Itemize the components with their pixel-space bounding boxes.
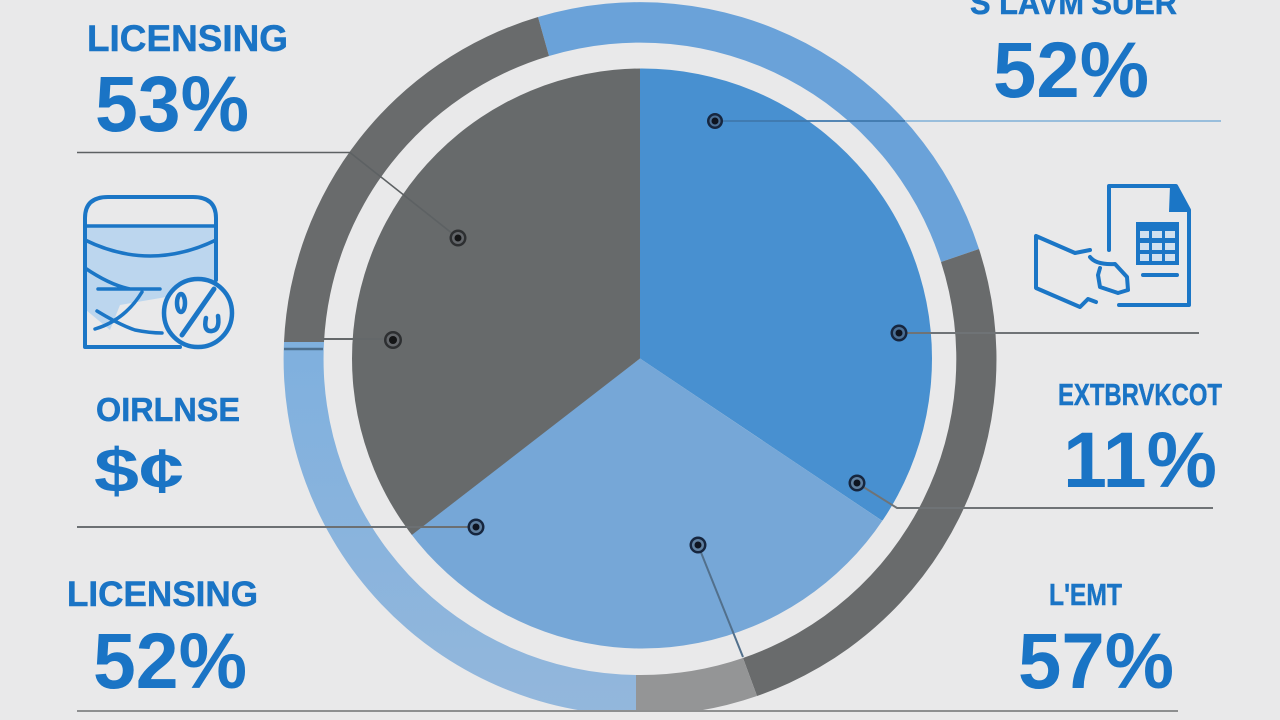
marker 3 [384,331,402,349]
stat: licensing 53% [87,18,288,148]
leader: licensing 53% [77,152,458,238]
marker 1 [707,113,723,129]
icon: database with percent badge [85,197,232,347]
pie slice: grey [352,68,640,535]
icon outer frame [85,197,216,347]
label: EXTBRVKCOT [1058,377,1222,412]
pie chart [352,68,932,648]
ring segment: lower-left blue [284,342,636,716]
pie slice: blue [640,68,932,521]
icon curves [85,240,216,333]
marker 5 [848,474,866,492]
icon: document with table and hand [1036,186,1190,307]
label: LICENSING [87,18,288,59]
leader: bottom [698,545,743,657]
value: $¢ [94,437,184,506]
table caption line [1143,273,1177,277]
leader lines [77,121,1221,711]
baseline rule [77,710,1178,712]
leader: right middle [899,332,1199,334]
label: L'EMT [1049,577,1122,612]
ring segment: right grey [743,249,996,696]
hand [1036,236,1128,307]
outer ring [284,2,996,716]
value: 57% [1018,616,1174,705]
stat: right 11% [1058,377,1222,504]
stat: top right 52% [970,0,1177,114]
stat: bottom right 57% [1018,577,1174,705]
document outline [1109,186,1189,305]
value: 52% [993,25,1149,114]
value: 53% [95,59,249,148]
label: LICENSING [67,575,258,614]
value: 52% [93,616,247,705]
leader: top right over pie [715,120,905,122]
ring band shadow [284,348,323,350]
ring segment: bottom light grey [636,658,757,716]
stat: licensing 52% [67,575,258,705]
document corner fold [1169,186,1190,212]
icon panel fill [86,226,215,330]
table [1136,222,1179,265]
marker 4 [890,324,908,342]
stat: left middle currency [94,391,240,506]
marker dots [384,113,908,554]
pie slice: light blue [410,358,882,648]
value: 11% [1063,415,1217,504]
leader: lower left [77,526,476,528]
icon shelf line [85,224,216,228]
ring segment: upper-left grey [284,17,549,342]
leader: extbrvkcot [857,483,1213,508]
ring segment: top blue [538,2,979,262]
icon percent badge [164,279,232,347]
leader: left middle [323,338,393,340]
marker 6 [468,518,484,536]
marker 2 [450,230,466,246]
marker 7 [690,536,706,554]
leader: top right [715,120,1221,122]
label: OIRLNSE [96,391,240,428]
